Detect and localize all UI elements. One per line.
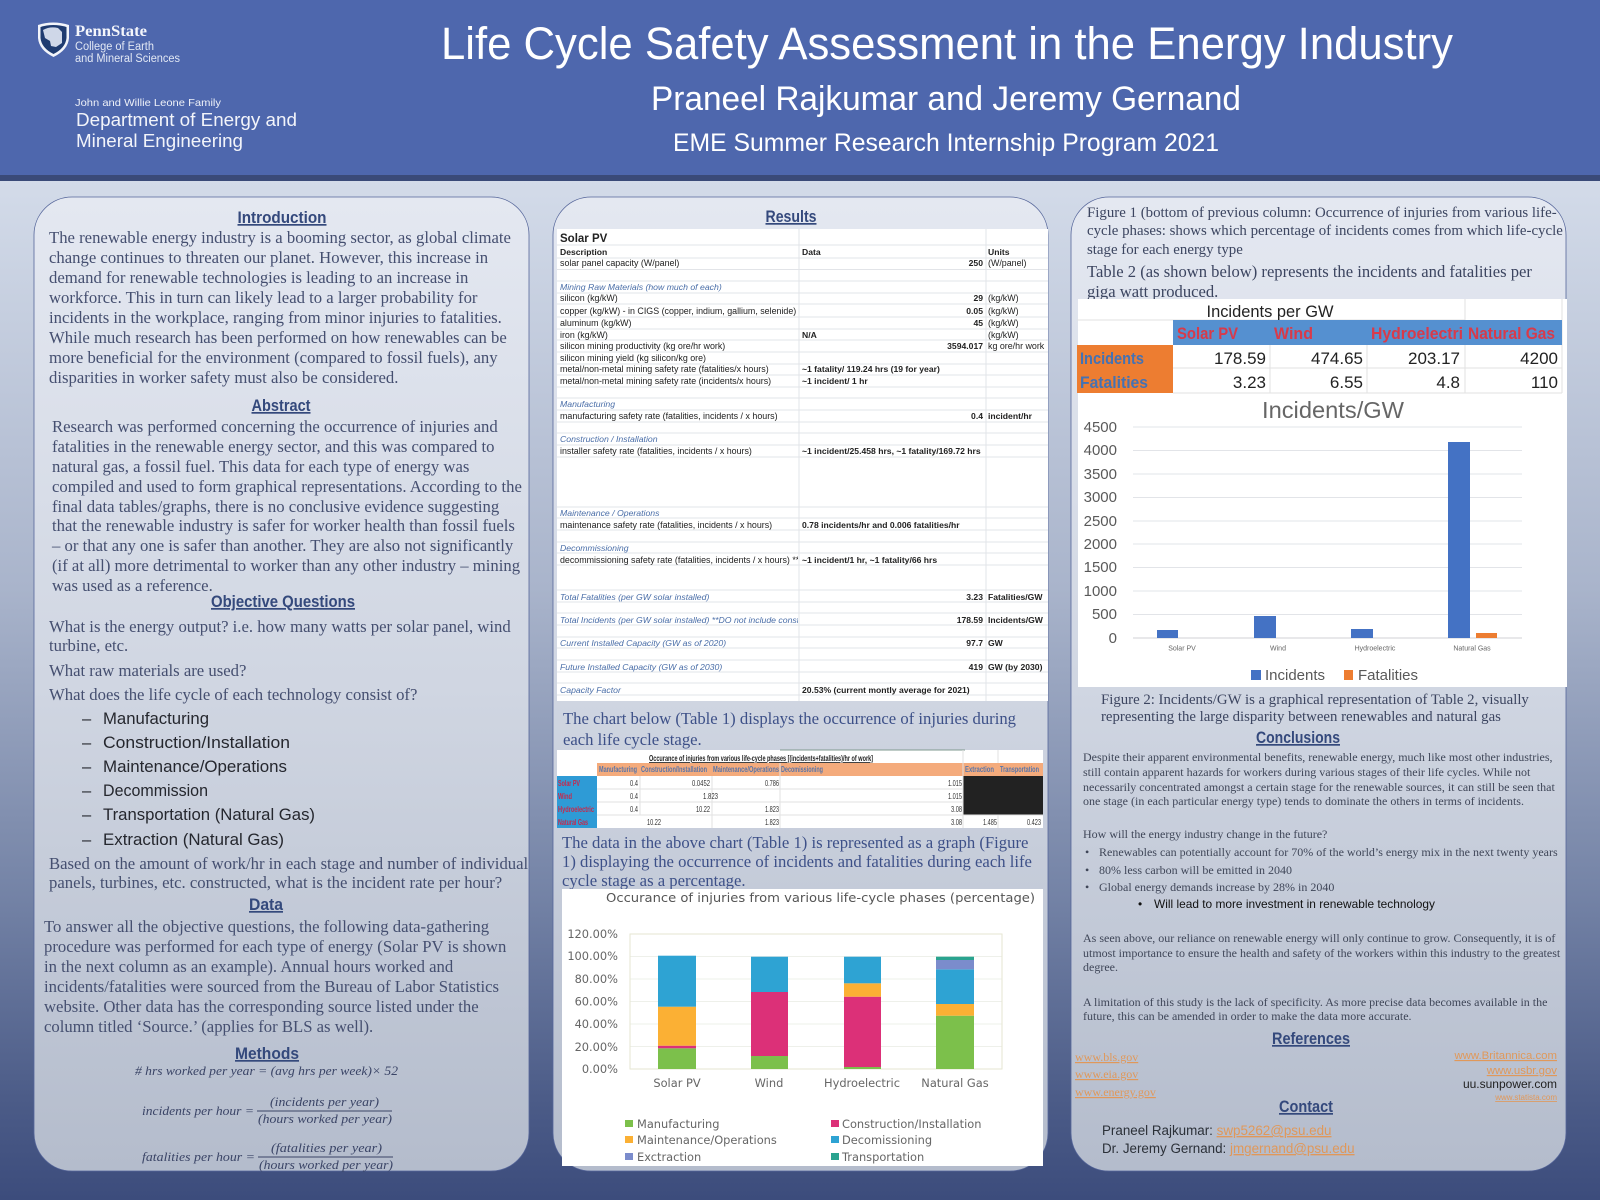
text: figure 1 intro bbox=[562, 833, 1032, 890]
table: Solar PV data: Mining Raw Materials (how much of each) bbox=[560, 282, 722, 292]
text: figure 2 caption: representing the large disparity between renewables and natural gas bbox=[1101, 709, 1501, 725]
table: Solar PV data: GW (by 2030) bbox=[988, 662, 1043, 672]
table: Solar PV data: Total Fatalities (per GW solar installed) bbox=[560, 592, 709, 602]
y axis labels bbox=[567, 927, 618, 1076]
x axis labels: Solar PV bbox=[1168, 646, 1196, 652]
legend: Decomissioning bbox=[842, 1133, 932, 1147]
table: Table 1 occurrence rates: 1.015 bbox=[948, 779, 962, 788]
text: conclusions: still contain apparent hazards for workers during various stages of their life cycles. While not bbox=[1083, 765, 1531, 779]
links: references right bbox=[1453, 1050, 1557, 1102]
list: life cycle stages: – bbox=[82, 782, 92, 800]
text: future outlook: • bbox=[1138, 897, 1142, 911]
title: Life Cycle Safety Assessment in the Energy Industry bbox=[441, 18, 1453, 69]
formula: fatalities per hour bbox=[142, 1141, 393, 1172]
text: future outlook: Will lead to more investment in renewable technology bbox=[1154, 897, 1435, 911]
links: references left bbox=[1075, 1050, 1156, 1099]
text: conclusions: Despite their apparent environmental benefits, renewable energy, much like most other industries, bbox=[1083, 750, 1553, 764]
text: contact details bbox=[1102, 1123, 1355, 1156]
text: figure 1 caption bbox=[1087, 205, 1563, 258]
text: objective questions: What raw materials are used? bbox=[49, 661, 246, 680]
legend: Fatalities bbox=[1358, 667, 1418, 684]
y axis labels: 60.00% bbox=[575, 994, 618, 1008]
table: Table 2 incidents per GW: Wind bbox=[1274, 324, 1313, 343]
table: Solar PV data: Decommissioning bbox=[560, 543, 629, 553]
x axis labels: Natural Gas bbox=[921, 1076, 989, 1090]
header banner bbox=[0, 0, 1600, 181]
text: contact details: Dr. Jeremy Gernand: jmgernand@psu.edu bbox=[1102, 1141, 1355, 1156]
list: life cycle stages: – bbox=[82, 758, 92, 776]
text: incident rate question: Based on the amount of work/hr in each stage and number of individual bbox=[49, 854, 529, 873]
table: Table 2 incidents per GW: 4.8 bbox=[1436, 373, 1460, 392]
table: Solar PV data: 250 bbox=[969, 258, 983, 268]
text: objective questions: What does the life cycle of each technology consist of? bbox=[49, 685, 417, 704]
text: introduction: incidents in the workplace, ranging from minor injuries to fatalities. bbox=[49, 308, 502, 327]
table: Solar PV data: Units bbox=[988, 247, 1010, 257]
text: abstract: Research was performed concerning the occurrence of injuries and bbox=[52, 417, 498, 436]
table: Table 1 occurrence rates: Wind bbox=[558, 792, 572, 801]
text: future outlook: Global energy demands increase by 28% in 2040 bbox=[1099, 880, 1334, 894]
y axis labels: 80.00% bbox=[575, 972, 618, 986]
y axis labels: 500 bbox=[1092, 606, 1117, 623]
authors: Praneel Rajkumar and Jeremy Gernand bbox=[651, 80, 1241, 118]
logo text: college: and Mineral Sciences bbox=[75, 53, 180, 65]
table: Solar PV data: 45 bbox=[973, 318, 983, 328]
legend: Manufacturing bbox=[637, 1117, 719, 1131]
table: Table 2 incidents per GW: 474.65 bbox=[1311, 349, 1363, 368]
table: Solar PV data: (kg/kW) bbox=[988, 318, 1019, 328]
list: life cycle stages bbox=[82, 710, 315, 849]
text: future outlook: 80% less carbon will be emitted in 2040 bbox=[1099, 863, 1292, 877]
heading: Objective Questions: Objective Questions bbox=[211, 592, 355, 611]
heading: Contact: Contact bbox=[1279, 1097, 1333, 1116]
text: abstract: final data tables/graphs, there is no conclusive evidence suggesting bbox=[52, 497, 500, 516]
table: Table 2 incidents per GW: Solar PV bbox=[1177, 324, 1239, 343]
table: Solar PV data: ~1 incident/1 hr, ~1 fatality/66 hrs bbox=[802, 555, 937, 565]
formula: incidents per hour: (hours worked per year) bbox=[258, 1112, 392, 1126]
table: Solar PV data: 178.59 bbox=[957, 615, 983, 625]
heading: Abstract: Abstract bbox=[252, 396, 311, 415]
table: Solar PV data: installer safety rate (fatalities, incidents / x hours) bbox=[560, 446, 752, 456]
table: Table 1 occurrence rates: 3.08 bbox=[951, 805, 962, 814]
x axis labels: Wind bbox=[1270, 646, 1286, 652]
formula: hours per year: # hrs worked per year = (avg hrs per week)× 52 bbox=[135, 1064, 398, 1078]
program: EME Summer Research Internship Program 2021 bbox=[673, 129, 1219, 157]
table: Solar PV data: (W/panel) bbox=[988, 258, 1027, 268]
text: future outlook: • bbox=[1085, 863, 1089, 877]
table: Solar PV data: ~1 fatality/ 119.24 hrs (19 for year) bbox=[802, 364, 940, 374]
table: Table 1 occurrence rates: 1.485 bbox=[983, 818, 997, 827]
legend: Exctraction bbox=[637, 1150, 701, 1164]
text: data: procedure was performed for each type of energy (Solar PV is shown bbox=[44, 937, 507, 956]
table: Table 1 occurrence rates: 0.786 bbox=[765, 779, 779, 788]
text: importance of safety: utmost importance to ensure the health and safety of the workers within this industry to the greatest bbox=[1083, 946, 1561, 960]
panel: middle column bbox=[553, 197, 1048, 1171]
table: Solar PV data: Incidents/GW bbox=[988, 615, 1044, 625]
y axis labels: 40.00% bbox=[575, 1017, 618, 1031]
text: introduction: disparities in worker safety must also be considered. bbox=[49, 368, 398, 387]
text: figure 1 intro: cycle stage as a percentage. bbox=[562, 871, 746, 890]
text: abstract: was used as a reference. bbox=[52, 576, 213, 595]
table: Table 1 occurrence rates: 0.423 bbox=[1027, 818, 1041, 827]
text: future outlook: How will the energy industry change in the future? bbox=[1083, 827, 1327, 841]
text: future outlook bbox=[1083, 827, 1558, 911]
text: limitation bbox=[1083, 995, 1547, 1023]
text: future outlook: • bbox=[1085, 845, 1089, 859]
text: abstract: compiled and used to form graphical representations. According to the bbox=[52, 477, 522, 496]
text: table 1 intro: each life cycle stage. bbox=[563, 730, 702, 749]
table: Table 1 occurrence rates: 1.015 bbox=[948, 792, 962, 801]
table: Table 1 occurrence rates: 1.823 bbox=[765, 805, 779, 814]
table: Table 2 incidents per GW: 178.59 bbox=[1214, 349, 1266, 368]
table: Table 1 occurrence rates: Hydroelectric bbox=[558, 805, 594, 814]
text: figure 1 caption: stage for each energy type bbox=[1087, 242, 1243, 258]
formula: fatalities per hour: (hours worked per year) bbox=[259, 1158, 393, 1172]
text: figure 1 caption: Figure 1 (bottom of previous column: Occurrence of injuries from various life- bbox=[1087, 205, 1557, 221]
text: objective questions bbox=[49, 617, 511, 704]
chart title: Incidents/GW bbox=[1262, 397, 1404, 423]
table: Solar PV data: Solar PV bbox=[560, 233, 608, 245]
text: data bbox=[44, 917, 507, 1036]
text: table 2 intro: Table 2 (as shown below) represents the incidents and fatalities per bbox=[1087, 262, 1532, 281]
table: Solar PV data: 97.7 bbox=[966, 638, 983, 648]
formula: incidents per hour: (incidents per year) bbox=[270, 1095, 379, 1109]
table: Table 1 occurrence rates: Construction/Installation bbox=[641, 765, 707, 774]
legend bbox=[625, 1117, 981, 1164]
text: introduction: workforce. This in turn can likely lead to a larger probability for bbox=[49, 288, 478, 307]
y axis labels: 2500 bbox=[1084, 513, 1117, 530]
table: Table 2 incidents per GW: Hydroelectri bbox=[1371, 324, 1463, 343]
text: figure 1 intro: The data in the above chart (Table 1) is represented as a graph (Figure bbox=[562, 833, 1028, 852]
table: Solar PV data: Data bbox=[802, 247, 821, 257]
white backing for table 2 and figure 2 bbox=[1078, 299, 1567, 687]
text: introduction: demand for renewable technologies is leading to an increase in bbox=[49, 268, 469, 287]
table: Table 1 occurrence rates: Occurance of injuries from various life-cycle phases [(incidents+fatalities)/hr of work] bbox=[649, 753, 873, 763]
table: Table 2 incidents per GW: Fatalities bbox=[1080, 373, 1148, 392]
text: incident rate question: panels, turbines, etc. constructed, what is the incident rate per hour? bbox=[49, 873, 502, 892]
table: Solar PV data: Future Installed Capacity (GW as of 2030) bbox=[560, 662, 722, 672]
links: references right: www.Britannica.com bbox=[1453, 1050, 1557, 1062]
text: incident rate question bbox=[49, 854, 529, 892]
heading: Conclusions: Conclusions bbox=[1256, 728, 1340, 747]
y axis labels: 0 bbox=[1109, 630, 1117, 647]
heading: Methods: Methods bbox=[235, 1044, 299, 1063]
table: Table 1 occurrence rates: Natural Gas bbox=[558, 818, 588, 827]
table: Solar PV data: 3594.017 bbox=[947, 341, 983, 351]
table: Solar PV data: Capacity Factor bbox=[560, 685, 622, 695]
table: Table 1 occurrence rates: Transportation bbox=[1000, 765, 1039, 774]
text: table 2 intro bbox=[1087, 262, 1532, 301]
table: Solar PV data: aluminum (kg/kW) bbox=[560, 318, 632, 328]
table: Solar PV data: Current Installed Capacity (GW as of 2020) bbox=[560, 638, 726, 648]
links: references right: www.usbr.gov bbox=[1486, 1065, 1557, 1077]
list: life cycle stages: Manufacturing bbox=[103, 710, 209, 728]
text: introduction: The renewable energy industry is a booming sector, as global climate bbox=[49, 228, 511, 247]
table: Solar PV data: Description bbox=[560, 247, 607, 257]
table: Solar PV data: Construction / Installation bbox=[560, 434, 658, 444]
table: Solar PV data: Total Incidents (per GW solar installed) **DO not include const bbox=[560, 615, 800, 625]
list: life cycle stages: Transportation (Natural Gas) bbox=[103, 806, 315, 824]
text: introduction bbox=[49, 228, 511, 387]
table: Table 1 occurrence rates: Solar PV bbox=[558, 779, 580, 788]
text: introduction: change continues to threaten our planet. However, this increase in bbox=[49, 248, 489, 267]
formula: incidents per hour: incidents per hour = bbox=[142, 1104, 254, 1118]
table: Solar PV data: 419 bbox=[969, 662, 983, 672]
y axis labels: 2000 bbox=[1084, 536, 1117, 553]
bar: Hydroelectric bbox=[844, 957, 881, 1069]
text: limitation: future, this can be amended in order to make the data more accurate. bbox=[1083, 1009, 1412, 1023]
table: Table 2 incidents per GW: 4200 bbox=[1520, 349, 1558, 368]
legend: Construction/Installation bbox=[842, 1117, 981, 1131]
table: Solar PV data: (kg/kW) bbox=[988, 330, 1019, 340]
table: Table 2 incidents per GW: Natural Gas bbox=[1468, 324, 1555, 343]
text: abstract: fatalities in the renewable energy sector, and this was compared to bbox=[52, 437, 494, 456]
table: Table 2 incidents per GW: Incidents bbox=[1080, 349, 1144, 368]
x axis labels bbox=[1168, 646, 1491, 652]
logo text: college: College of Earth bbox=[75, 41, 154, 53]
list: life cycle stages: – bbox=[82, 734, 92, 752]
table: Solar PV data: Maintenance / Operations bbox=[560, 508, 660, 518]
table: Table 2 incidents per GW: 6.55 bbox=[1330, 373, 1363, 392]
table: Table 1 occurrence rates: 3.08 bbox=[951, 818, 962, 827]
table: Solar PV data: maintenance safety rate (fatalities, incidents / x hours) bbox=[560, 520, 772, 530]
table: Solar PV data: ~1 incident/25.458 hrs, ~1 fatality/169.72 hrs bbox=[802, 446, 981, 456]
table: Solar PV data: 20.53% (current montly average for 2021) bbox=[802, 685, 970, 695]
formula: incidents per hour bbox=[142, 1095, 392, 1126]
text: limitation: A limitation of this study is the lack of specificity. As more precise data becomes available in the bbox=[1083, 995, 1547, 1009]
table: Table 1 occurrence rates: 0.0452 bbox=[692, 779, 710, 788]
text: data: column titled ‘Source.’ (applies for BLS as well). bbox=[44, 1017, 373, 1036]
table: Solar PV data: metal/non-metal mining safety rate (fatalities/x hours) bbox=[560, 364, 769, 374]
text: table 1 intro bbox=[563, 709, 1017, 749]
list: life cycle stages: – bbox=[82, 710, 92, 728]
table: Table 2 incidents per GW: Incidents per GW bbox=[1206, 302, 1334, 321]
y axis labels bbox=[1084, 419, 1117, 647]
text: data: website. Other data has the corresponding source listed under the bbox=[44, 997, 479, 1016]
table: Table 1 occurrence rates: 1.823 bbox=[703, 792, 718, 801]
text: abstract bbox=[51, 417, 522, 595]
table: Table 1 occurrence rates bbox=[557, 750, 1043, 828]
table: Solar PV data: 0.05 bbox=[966, 306, 983, 316]
logo text: college: PennState bbox=[75, 23, 147, 40]
table: Table 1 occurrence rates: Decomissioning bbox=[781, 765, 823, 774]
list: life cycle stages: Maintenance/Operations bbox=[103, 758, 287, 776]
icon: Penn State shield bbox=[38, 22, 69, 57]
table: Table 1 occurrence rates: Manufacturing bbox=[599, 765, 637, 774]
chart title: Occurance of injuries from various life-cycle phases (percentage) bbox=[606, 891, 1035, 905]
text: figure 2 caption bbox=[1101, 692, 1529, 725]
heading: References: References bbox=[1272, 1029, 1350, 1048]
table: Solar PV data: (kg/kW) bbox=[988, 306, 1019, 316]
chart: incidents per GW bbox=[1084, 397, 1522, 684]
heading: Data: Data bbox=[249, 895, 283, 914]
formula: fatalities per hour: (fatalities per year) bbox=[271, 1141, 382, 1155]
table: Solar PV data: silicon mining productivity (kg ore/hr work) bbox=[560, 341, 725, 351]
table: Solar PV data: 0.4 bbox=[971, 411, 983, 421]
table: Solar PV data: silicon mining yield (kg silicon/kg ore) bbox=[560, 353, 706, 363]
list: life cycle stages: Construction/Installation bbox=[103, 734, 290, 752]
text: conclusions: one stage (in each particular energy type) tends to dominate the others in terms of incidents. bbox=[1083, 794, 1524, 808]
bar: Natural Gas bbox=[936, 957, 974, 1069]
list: life cycle stages: – bbox=[82, 806, 92, 824]
text: table 1 intro: The chart below (Table 1) displays the occurrence of injuries during bbox=[563, 709, 1017, 728]
table: Solar PV data: GW bbox=[988, 638, 1004, 648]
table: Solar PV data: 3.23 bbox=[966, 592, 983, 602]
bar: Solar PV bbox=[658, 956, 696, 1069]
text: contact details: Praneel Rajkumar: swp5262@psu.edu bbox=[1102, 1123, 1331, 1138]
bar: Wind bbox=[751, 957, 788, 1069]
table: Solar PV data bbox=[557, 229, 1048, 701]
table: Table 1 occurrence rates: 0.4 bbox=[630, 792, 638, 801]
text: future outlook: • bbox=[1085, 880, 1089, 894]
table: Table 1 occurrence rates: 10.22 bbox=[696, 805, 710, 814]
table: Table 1 occurrence rates: Extraction bbox=[965, 765, 994, 774]
table: Solar PV data: N/A bbox=[802, 330, 817, 340]
table: Table 2 incidents per GW bbox=[1077, 299, 1562, 393]
x axis labels: Wind bbox=[755, 1076, 783, 1090]
text: objective questions: What is the energy output? i.e. how many watts per solar panel, wind bbox=[49, 617, 511, 636]
table: Table 1 occurrence rates: 1.823 bbox=[765, 818, 779, 827]
table: Table 2 incidents per GW: 203.17 bbox=[1408, 349, 1460, 368]
legend: Incidents bbox=[1265, 667, 1325, 684]
table: Solar PV data: kg ore/hr work bbox=[988, 341, 1045, 351]
y axis labels: 1000 bbox=[1084, 583, 1117, 600]
x axis labels: Natural Gas bbox=[1453, 646, 1491, 652]
table: Solar PV data: 29 bbox=[973, 293, 983, 303]
text: conclusions bbox=[1083, 750, 1555, 808]
table: Solar PV data: solar panel capacity (W/panel) bbox=[560, 258, 679, 268]
x axis labels: Solar PV bbox=[653, 1076, 701, 1090]
links: references right: uu.sunpower.com bbox=[1463, 1077, 1557, 1091]
list: life cycle stages: Decommission bbox=[103, 782, 208, 800]
y axis labels: 100.00% bbox=[567, 949, 618, 963]
text: abstract: – or that any one is safer than another. They are also not significantly bbox=[51, 536, 514, 555]
table: Solar PV data: (kg/kW) bbox=[988, 293, 1019, 303]
x axis labels: Hydroelectric bbox=[1355, 646, 1396, 652]
heading: Introduction: Introduction bbox=[238, 208, 326, 227]
links: references left: www.bls.gov bbox=[1075, 1050, 1138, 1064]
table: Table 1 occurrence rates: 0.4 bbox=[630, 779, 638, 788]
bars bbox=[1157, 442, 1497, 638]
text: table 2 intro: giga watt produced. bbox=[1087, 282, 1218, 301]
links: references right: www.statista.com bbox=[1494, 1093, 1557, 1102]
y axis labels: 4000 bbox=[1084, 442, 1117, 459]
table: Solar PV data: metal/non-metal mining safety rate (incidents/x hours) bbox=[560, 376, 771, 386]
text: introduction: more beneficial for the environment (compared to fossil fuels), any bbox=[49, 348, 498, 367]
table: Solar PV data: incident/hr bbox=[988, 411, 1033, 421]
text: abstract: that the renewable industry is safer for worker health than fossil fuels bbox=[52, 516, 515, 535]
text: importance of safety: degree. bbox=[1083, 960, 1118, 974]
table: Solar PV data: 0.78 incidents/hr and 0.006 fatalities/hr bbox=[802, 520, 960, 530]
logo text: department: Department of Energy and bbox=[76, 110, 297, 130]
table: Solar PV data: iron (kg/kW) bbox=[560, 330, 608, 340]
text: data: To answer all the objective questions, the following data-gathering bbox=[44, 917, 490, 936]
text: figure 1 caption: cycle phases: shows which percentage of incidents comes from which life-cycle bbox=[1087, 223, 1563, 239]
y axis labels: 120.00% bbox=[567, 927, 618, 941]
table: Table 2 incidents per GW: 3.23 bbox=[1233, 373, 1266, 392]
text: figure 1 intro: 1) displaying the occurrence of incidents and fatalities during each life bbox=[562, 852, 1032, 871]
formula: fatalities per hour: fatalities per hour = bbox=[142, 1150, 255, 1164]
logo text: college bbox=[75, 23, 180, 65]
text: objective questions: turbine, etc. bbox=[49, 636, 128, 655]
text: future outlook: Renewables can potentially account for 70% of the world’s energy mix in the next twenty years bbox=[1099, 845, 1558, 859]
text: data: in the next column as an example). Annual hours worked and bbox=[44, 957, 454, 976]
links: references left: www.eia.gov bbox=[1075, 1067, 1138, 1081]
text: abstract: (if at all) more detrimental to worker than any other industry – mining bbox=[52, 556, 521, 575]
logo text: department bbox=[75, 97, 297, 151]
table: Solar PV data: ~1 incident/ 1 hr bbox=[802, 376, 868, 386]
text: abstract: natural gas, a fossil fuel. This data for each type of energy was bbox=[52, 457, 469, 476]
text: importance of safety bbox=[1083, 931, 1561, 974]
table: Table 2 incidents per GW: 110 bbox=[1531, 373, 1558, 392]
table: Solar PV data: decommissioning safety rate (fatalities, incidents / x hours) **I bbox=[560, 555, 802, 565]
table: Solar PV data: silicon (kg/kW) bbox=[560, 293, 618, 303]
y axis labels: 1500 bbox=[1084, 559, 1117, 576]
logo text: department: John and Willie Leone Family bbox=[75, 97, 222, 109]
text: importance of safety: As seen above, our reliance on renewable energy will only continue to grow. Consequently, it is of bbox=[1083, 931, 1555, 945]
links: references left: www.energy.gov bbox=[1075, 1085, 1156, 1099]
text: data: incidents/fatalities were sourced from the Bureau of Labor Statistics bbox=[44, 977, 499, 996]
x axis labels bbox=[653, 1076, 989, 1090]
y axis labels: 0.00% bbox=[582, 1062, 618, 1076]
legend bbox=[1251, 667, 1418, 684]
panel: right column bbox=[1071, 197, 1567, 1171]
logo text: department: Mineral Engineering bbox=[76, 131, 243, 151]
table: Solar PV data: Manufacturing bbox=[560, 399, 615, 409]
table: Solar PV data: copper (kg/kW) - in CIGS (copper, indium, gallium, selenide) pa bbox=[560, 306, 809, 316]
y axis labels: 4500 bbox=[1084, 419, 1117, 436]
heading: Results: Results bbox=[766, 207, 816, 226]
table: Table 1 occurrence rates: 0.4 bbox=[630, 805, 638, 814]
table: Table 1 occurrence rates: Maintenance/Operations bbox=[713, 765, 779, 774]
text: figure 2 caption: Figure 2: Incidents/GW is a graphical representation of Table 2, visually bbox=[1101, 692, 1529, 708]
y axis labels: 20.00% bbox=[575, 1040, 618, 1054]
table: Table 1 occurrence rates: 10.22 bbox=[647, 818, 661, 827]
text: introduction: While much research has been performed on how renewables can be bbox=[49, 328, 507, 347]
list: life cycle stages: Extraction (Natural Gas) bbox=[103, 831, 284, 849]
table: Solar PV data: Fatalities/GW bbox=[988, 592, 1043, 602]
x axis labels: Hydroelectric bbox=[824, 1076, 900, 1090]
table: Solar PV data: manufacturing safety rate (fatalities, incidents / x hours) bbox=[560, 411, 778, 421]
text: conclusions: necessarily concentrated amongst a certain stage for the renewable sources, it can still be seen that bbox=[1083, 780, 1555, 794]
list: life cycle stages: – bbox=[82, 831, 92, 849]
y axis labels: 3500 bbox=[1084, 466, 1117, 483]
legend: Maintenance/Operations bbox=[637, 1133, 777, 1147]
y axis labels: 3000 bbox=[1084, 489, 1117, 506]
legend: Transportation bbox=[841, 1150, 924, 1164]
chart: stacked bars of injuries by life-cycle phase bbox=[562, 889, 1043, 1166]
panel: left column bbox=[34, 197, 529, 1172]
